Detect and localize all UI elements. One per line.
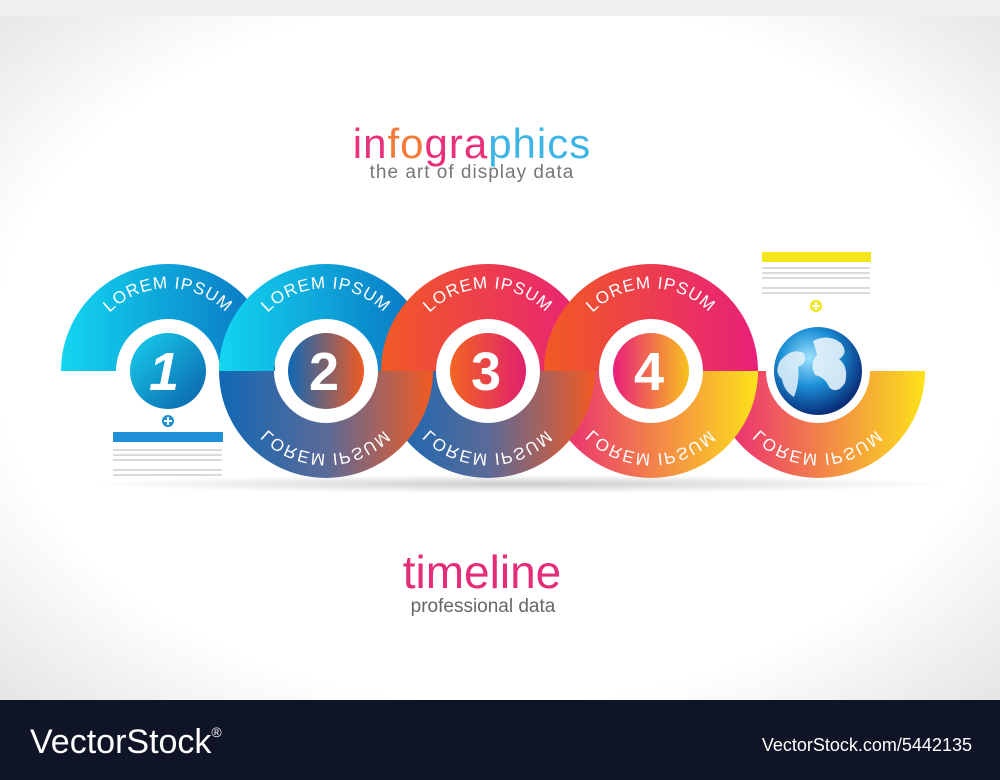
ring 5 bottom: LOREM IPSUM xyxy=(752,430,882,466)
ring 4 bottom xyxy=(570,371,758,478)
ring 2 top: 2 xyxy=(309,342,339,402)
shadow xyxy=(90,475,950,493)
ring 3 bottom xyxy=(407,371,595,478)
ring 2 bottom xyxy=(219,371,433,478)
ring 1 xyxy=(61,264,275,409)
ring 2 top: LOREM IPSUM xyxy=(260,276,390,312)
footer: ® xyxy=(211,724,222,740)
footer: VectorStock.com/5442135 xyxy=(762,735,972,755)
footer: VectorStock xyxy=(30,723,211,761)
ring 3 bottom: LOREM IPSUM xyxy=(422,430,552,466)
ring 3 top: LOREM IPSUM xyxy=(422,276,552,312)
footer xyxy=(0,700,1000,780)
title: infographics xyxy=(353,120,591,167)
ring 4 top: LOREM IPSUM xyxy=(586,276,716,312)
ring 4 top: 4 xyxy=(634,342,664,402)
ring 3 top xyxy=(381,264,570,409)
ring 3 top: 3 xyxy=(471,342,501,402)
ring 4 top xyxy=(544,264,758,409)
ring 4 bottom: LOREM IPSUM xyxy=(586,430,716,466)
title: the art of display data xyxy=(370,162,574,183)
ring 2 bottom: LOREM IPSUM xyxy=(260,430,390,466)
subtitle: timeline: professional data xyxy=(411,596,556,617)
timeline ribbon xyxy=(61,264,925,478)
ring 1: 1 xyxy=(149,342,179,402)
ring 1: LOREM IPSUM xyxy=(102,276,232,312)
ring 5 bottom xyxy=(734,371,925,478)
icon: globe xyxy=(774,327,862,415)
ring 2 top xyxy=(219,264,407,409)
text block: left xyxy=(113,415,223,475)
subtitle: timeline: timeline xyxy=(403,546,561,598)
text block: right xyxy=(762,252,871,312)
